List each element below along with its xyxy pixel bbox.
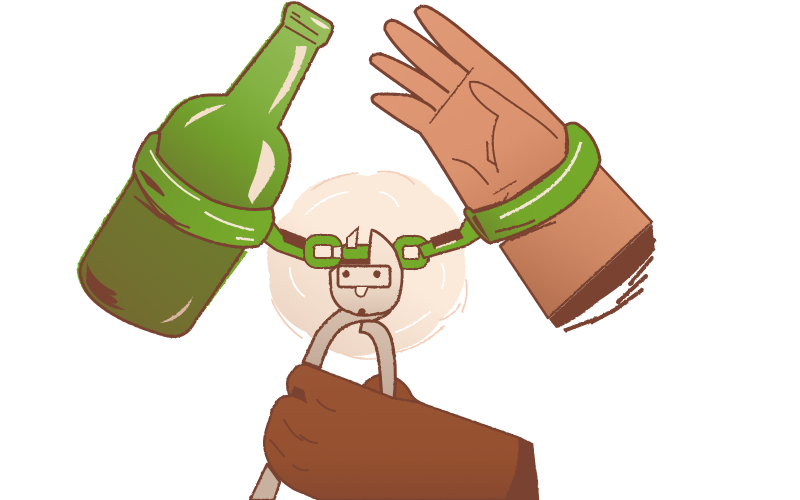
fist and forearm xyxy=(264,364,539,500)
lower handle end xyxy=(250,464,280,500)
hand cuff xyxy=(465,123,600,243)
pliers plate xyxy=(338,266,390,287)
bottle highlights xyxy=(160,46,307,323)
pliers xyxy=(303,228,402,400)
bottle body xyxy=(80,3,333,337)
bottle lip lines xyxy=(285,12,318,44)
pliers upper jaw xyxy=(347,228,358,248)
bottle lip highlight xyxy=(310,17,330,29)
bottle green offset edges xyxy=(77,2,330,336)
sleeve dark trim xyxy=(549,224,655,330)
fist back knuckle xyxy=(360,375,424,420)
pliers head xyxy=(330,230,402,315)
bottle xyxy=(77,2,333,337)
finger gaps xyxy=(290,386,307,404)
forearm cuff shadow xyxy=(504,438,539,500)
pliers left handle xyxy=(303,306,394,368)
pliers rivets xyxy=(342,270,381,316)
pliers small tooth xyxy=(333,246,342,258)
background glow blob xyxy=(267,172,467,359)
sleeve xyxy=(500,166,655,330)
chain: left links xyxy=(260,218,374,265)
chain: right links xyxy=(398,214,482,264)
bottle band xyxy=(134,132,274,247)
bottle shadow strokes xyxy=(86,262,125,310)
hand xyxy=(370,6,567,212)
finger lines xyxy=(412,50,557,201)
pliers right handle xyxy=(360,321,395,400)
